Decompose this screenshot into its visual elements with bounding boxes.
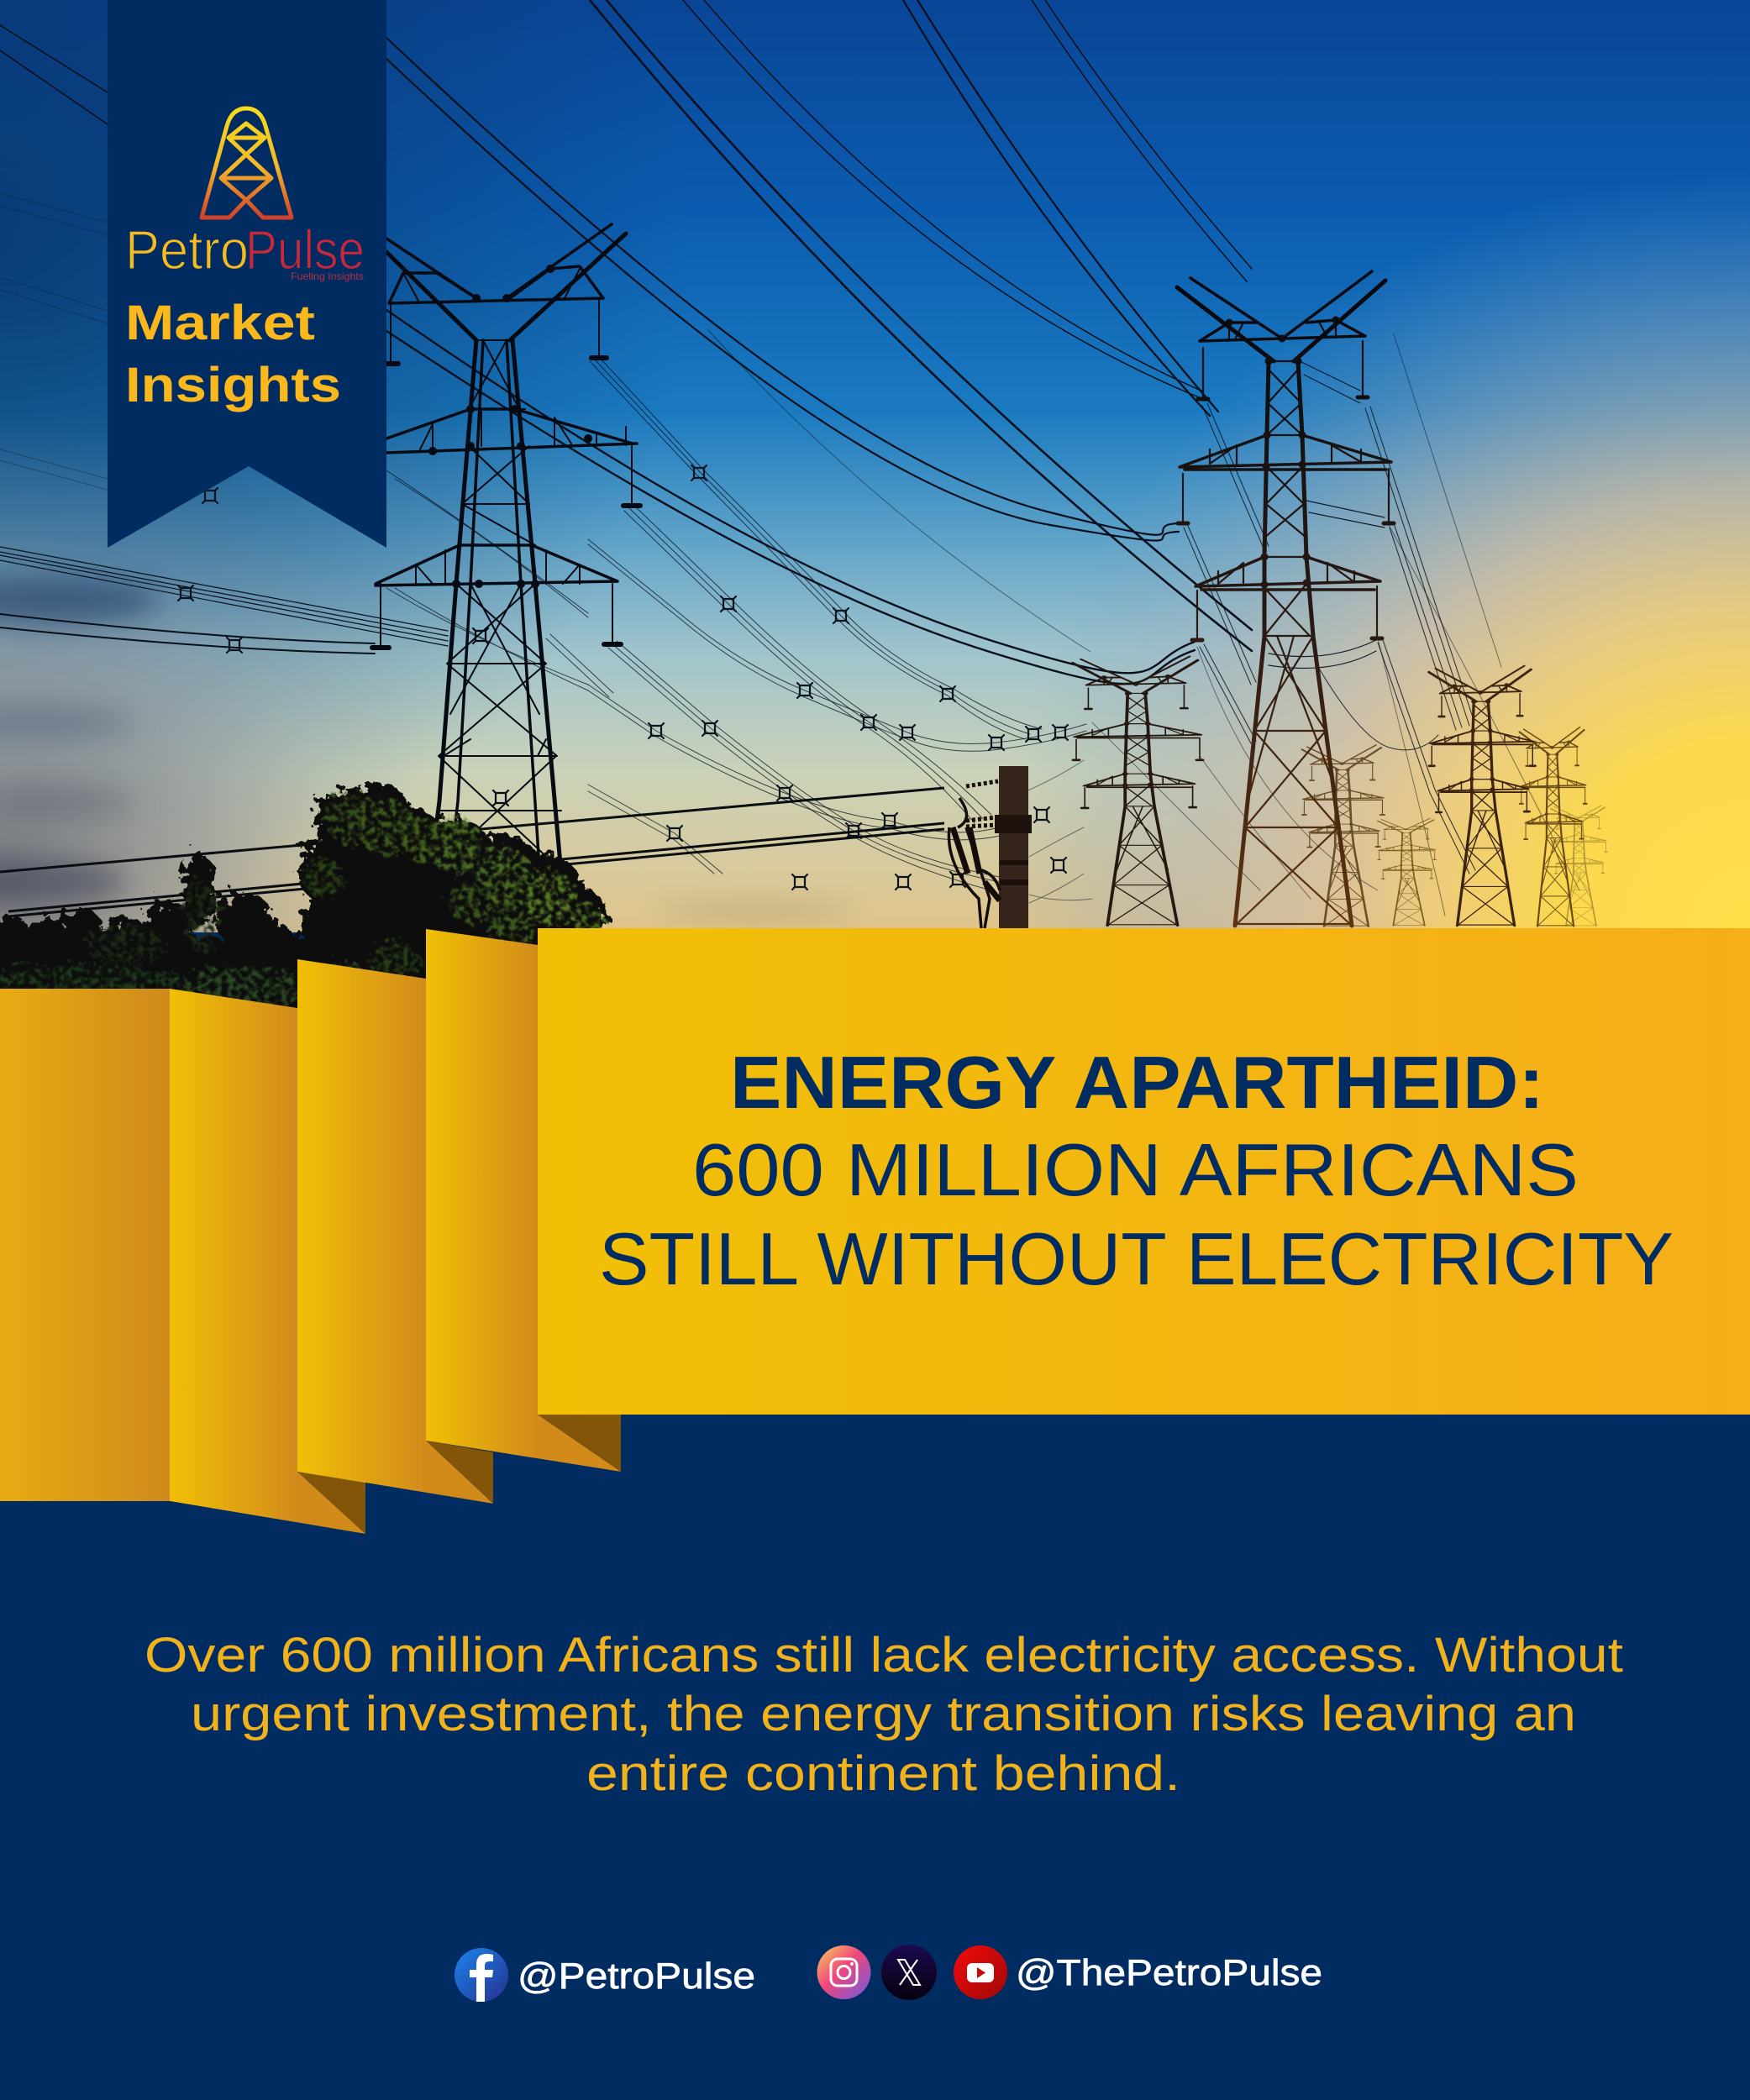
social handle: other platforms: @ThePetroPulse [1016,1952,1322,1993]
foreground wires [0,788,944,916]
photo: sunset sky [0,0,1750,932]
logo wordmark [125,218,365,281]
panel: fold one [170,989,365,1534]
panel: logo banner [108,0,386,548]
heading: Market Insights: Insights [125,358,341,412]
heading: Market Insights [125,296,341,412]
logo wordmark: Pulse [245,218,365,281]
utility pole [949,766,1032,930]
fold shadow two [426,1441,493,1504]
logo tagline: Fueling Insights [291,270,364,282]
icon: PetroPulse tower logo [202,108,292,218]
icon: youtube [954,1945,1007,1999]
fold shadow three [538,1415,621,1472]
panel: flat left [0,989,170,1501]
icon: X [881,1945,937,2000]
icon: facebook [455,1948,508,2002]
heading: Market Insights: Market [125,296,315,350]
navy footer background [0,1415,1750,2100]
body text: entire continent behind. [586,1746,1180,1801]
panel: main title banner [538,928,1750,1415]
title [599,1041,1674,1300]
tower: main right pylon [1177,271,1394,926]
tower: mid-distance left [1073,656,1203,926]
tower: mid-distance right [1429,666,1535,926]
trees [0,783,607,1029]
title: STILL WITHOUT ELECTRICITY [599,1217,1674,1300]
fold shadow one [297,1472,365,1534]
body text: Over 600 million Africans still lack electricity access. Without [145,1628,1623,1683]
title: ENERGY APARTHEID: [730,1041,1544,1124]
panel: fold three [426,929,621,1472]
body text: urgent investment, the energy transition risks leaving an [191,1687,1576,1741]
ribbon: folded panels [0,929,621,1534]
logo wordmark: Petro [125,218,249,281]
social handle: facebook: @PetroPulse [518,1956,755,1997]
distant transmission towers [1302,727,1607,927]
panel: fold two [297,959,493,1504]
tower: main left pylon [372,224,640,874]
body text [145,1628,1623,1801]
title: 600 MILLION AFRICANS [692,1128,1579,1211]
icon: instagram [817,1945,870,1999]
power lines [0,0,1579,916]
